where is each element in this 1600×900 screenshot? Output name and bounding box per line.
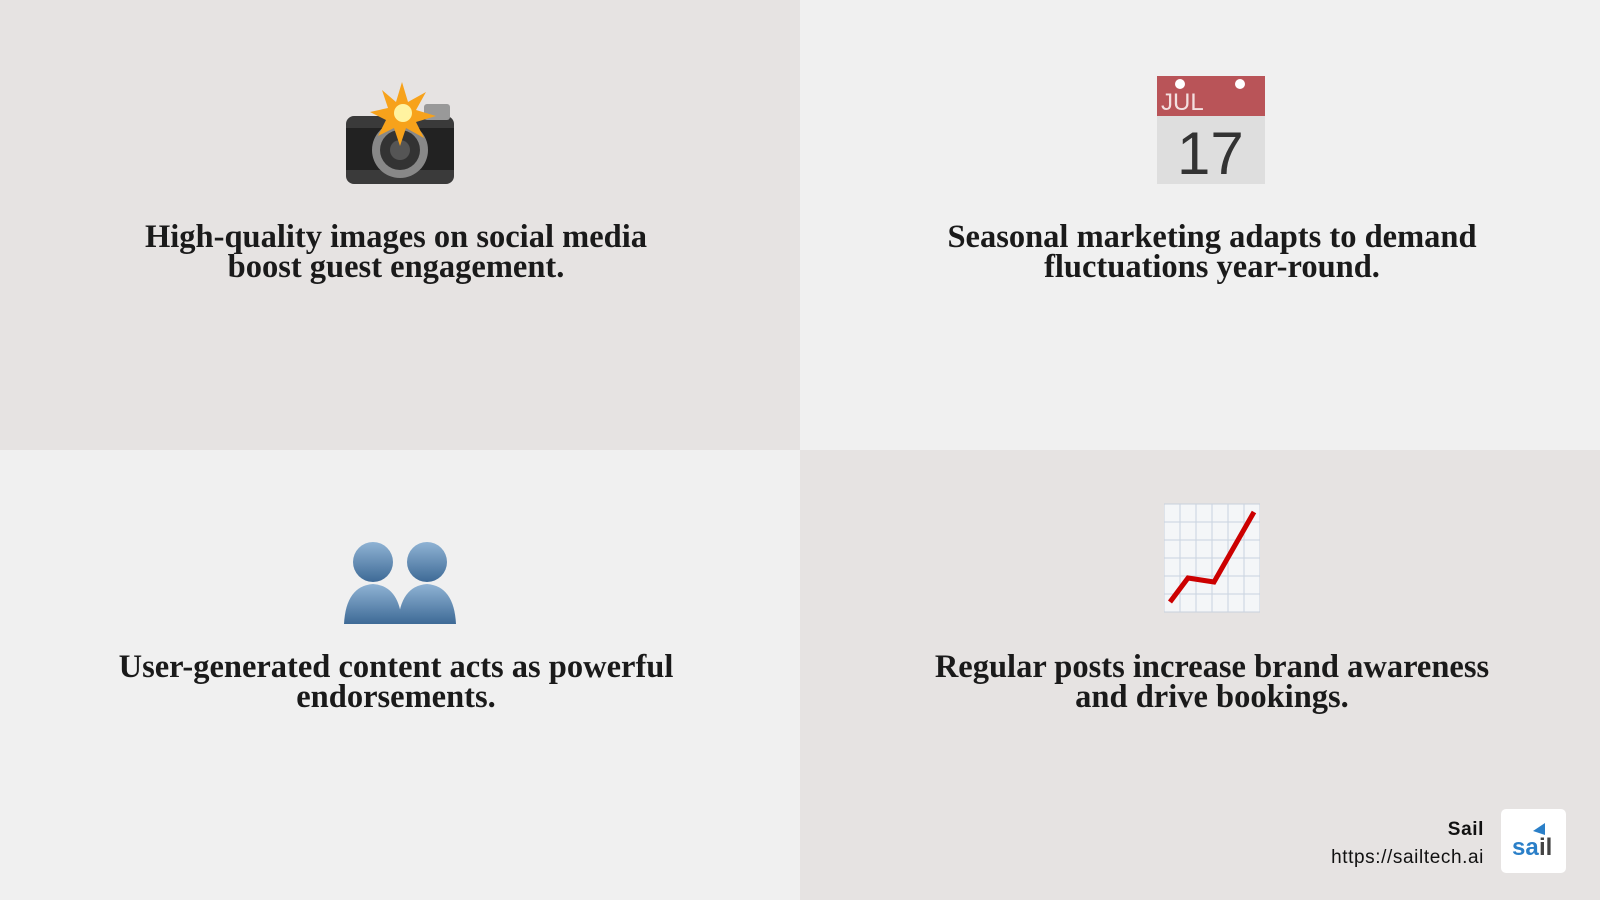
logo: sa	[1512, 834, 1539, 861]
icon: two silhouettes	[344, 542, 456, 624]
text: images: High-quality images on social media	[145, 219, 647, 255]
text: regular posts: Regular posts increase brand awareness	[935, 649, 1489, 685]
text: regular posts: and drive bookings.	[1075, 679, 1349, 715]
text: seasonal: fluctuations year-round.	[1044, 249, 1380, 285]
panel: regular posts	[800, 450, 1600, 900]
text: ugc: User-generated content acts as powerful	[119, 649, 673, 685]
logo: il	[1539, 834, 1552, 861]
panel: ugc	[0, 450, 800, 900]
panel: images	[0, 0, 800, 450]
panel: seasonal	[800, 0, 1600, 450]
text: regular posts	[935, 649, 1489, 715]
icon: camera with flash	[346, 82, 454, 184]
logo	[1501, 809, 1566, 873]
icon: chart increasing	[1164, 504, 1260, 612]
text: ugc: endorsements.	[296, 679, 496, 715]
icon: calendar	[1157, 76, 1265, 184]
text: images	[145, 219, 647, 285]
text: ugc	[119, 649, 673, 715]
text: seasonal: Seasonal marketing adapts to demand	[947, 219, 1477, 255]
text: images: boost guest engagement.	[228, 249, 564, 285]
brand text: https://sailtech.ai	[1331, 847, 1484, 868]
brand text: Sail	[1448, 819, 1484, 840]
icon: calendar: JUL	[1161, 89, 1204, 116]
text: seasonal	[947, 219, 1477, 285]
brand text	[1331, 819, 1484, 868]
